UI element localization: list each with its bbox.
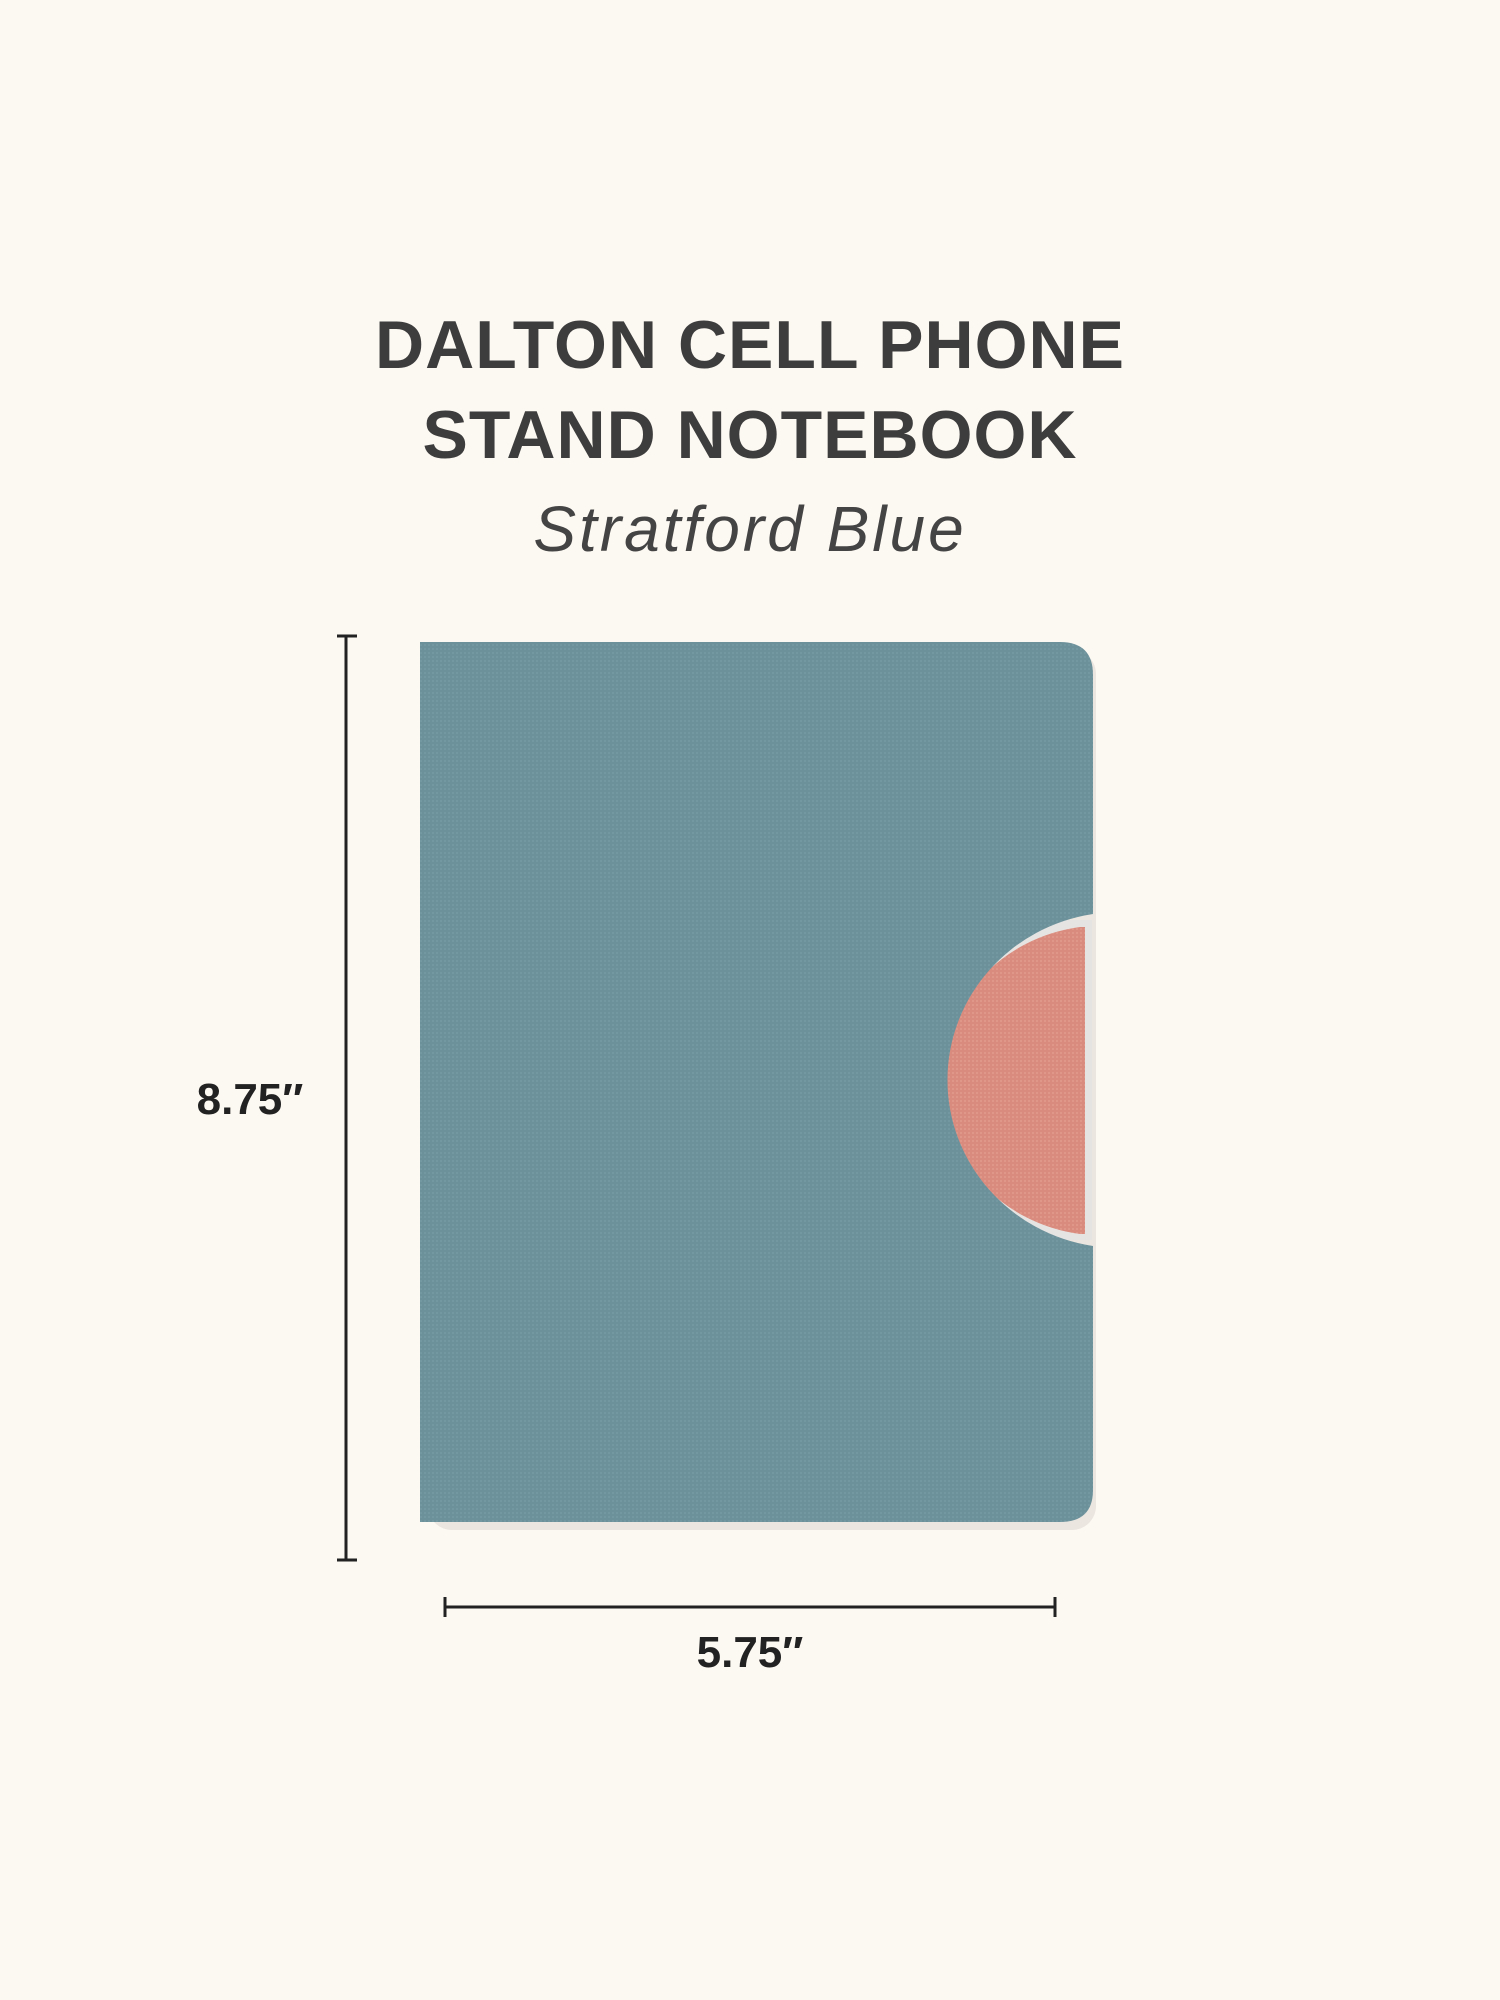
width label: 5.75″ <box>697 1628 803 1677</box>
pages under cutout <box>1000 920 1092 1240</box>
title <box>375 307 1125 473</box>
height label: 8.75″ <box>197 1075 303 1124</box>
blue cover with cutout <box>420 642 1093 1522</box>
width dimension line <box>445 1597 1055 1617</box>
title: DALTON CELL PHONE <box>375 307 1125 383</box>
title: STAND NOTEBOOK <box>423 397 1077 473</box>
pink tab <box>940 927 1085 1234</box>
subtitle: Stratford Blue <box>533 493 967 565</box>
notebook shadow <box>428 650 1096 1530</box>
height dimension line <box>337 636 357 1560</box>
